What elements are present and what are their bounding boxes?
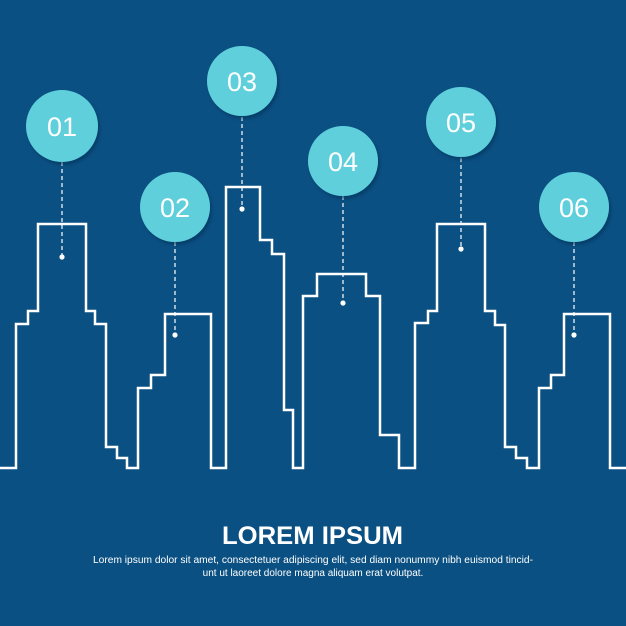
marker 04: 04 xyxy=(328,147,358,177)
marker 05: 05 xyxy=(446,108,476,138)
skyline outline xyxy=(0,187,626,468)
marker 01: 01 xyxy=(47,112,77,142)
marker 04 xyxy=(308,126,378,306)
marker 05 xyxy=(426,87,496,252)
marker 02: 02 xyxy=(160,193,190,223)
body text xyxy=(93,555,533,579)
marker 06 xyxy=(539,172,609,338)
body text: Lorem ipsum dolor sit amet, consectetuer adipiscing elit, sed diam nonummy nibh euismod tincid- xyxy=(93,555,533,566)
marker 02 xyxy=(140,172,210,338)
marker 01 xyxy=(26,90,98,260)
marker 03 xyxy=(207,46,277,212)
body text: unt ut laoreet dolore magna aliquam erat volutpat. xyxy=(203,568,423,579)
marker 03: 03 xyxy=(227,67,257,97)
marker 06: 06 xyxy=(559,193,589,223)
title: LOREM IPSUM xyxy=(222,522,403,550)
